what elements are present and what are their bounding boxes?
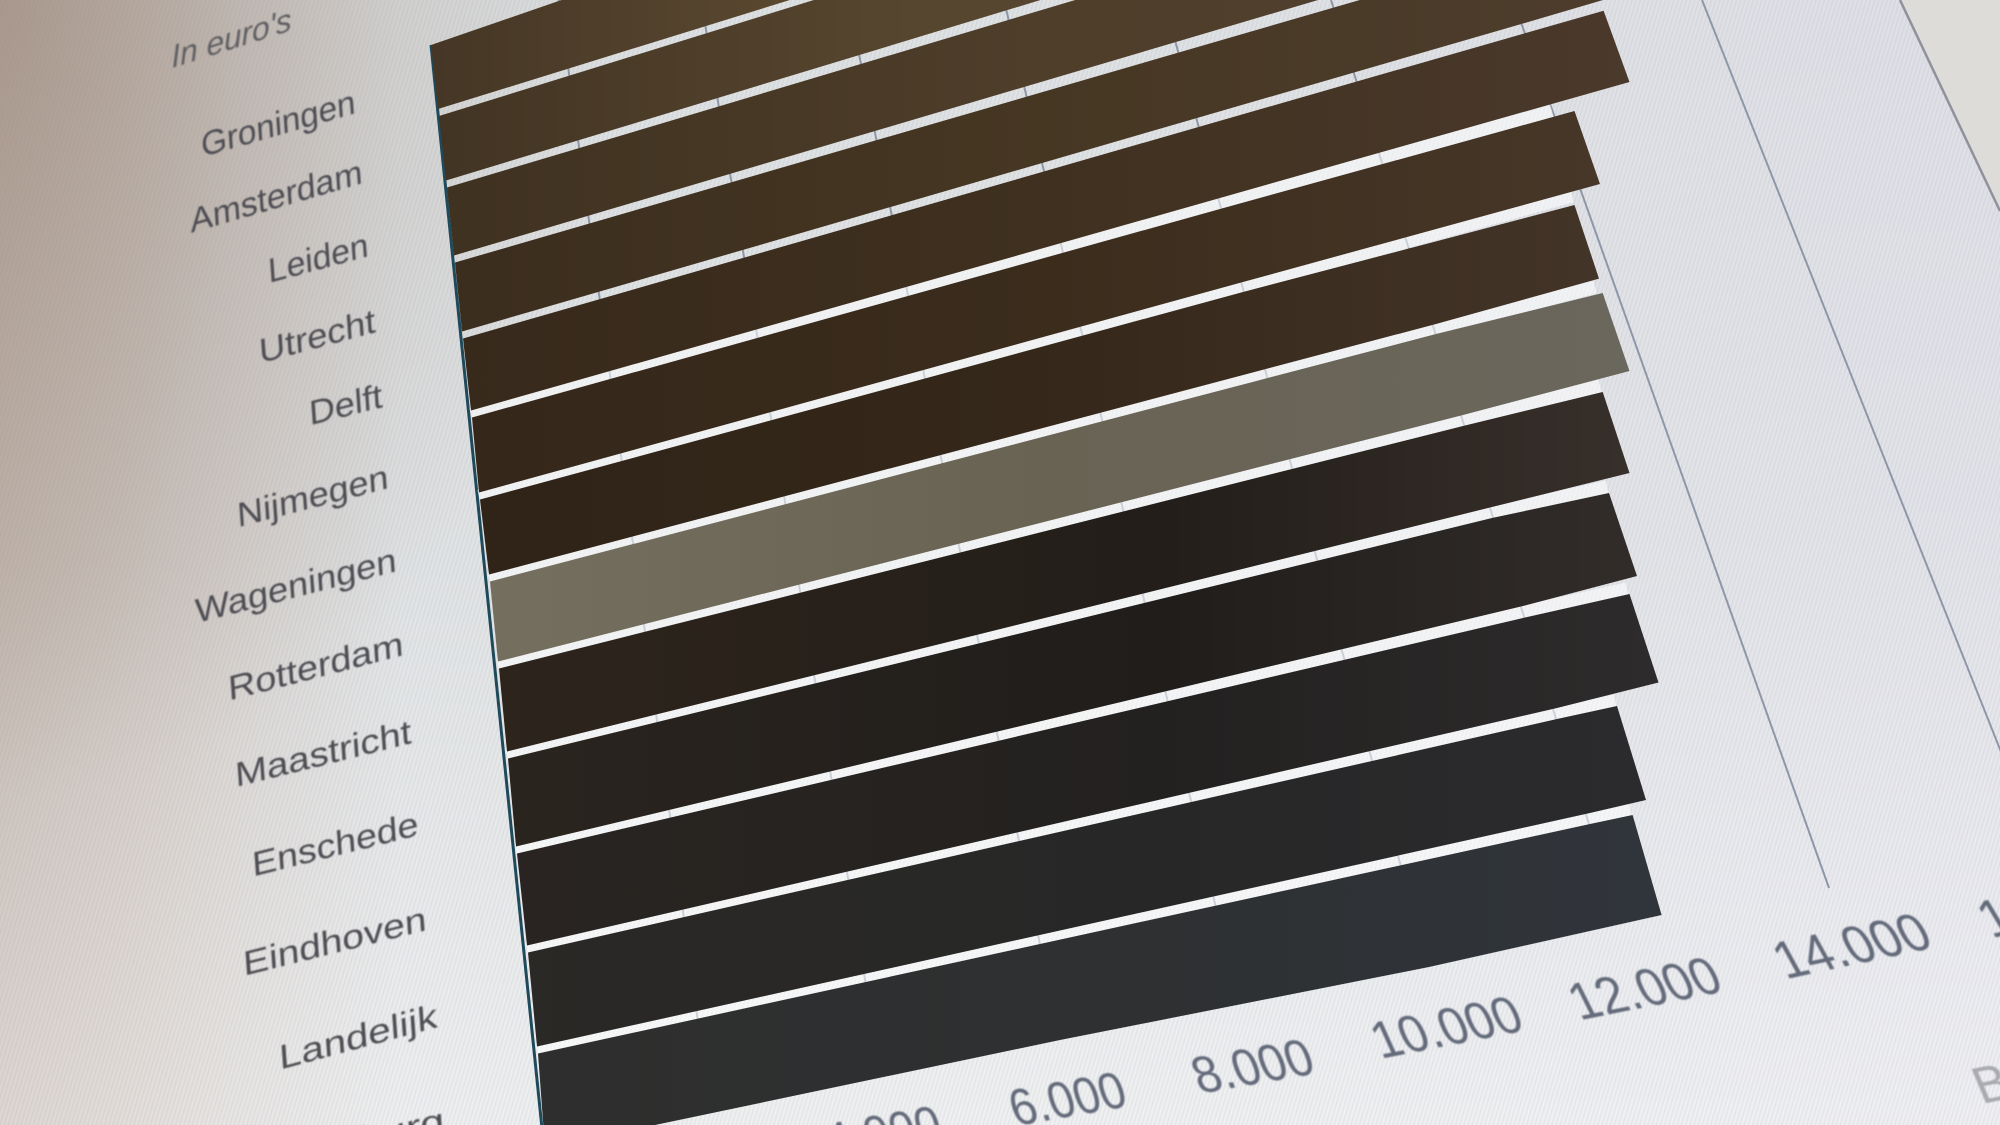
label: Wageningen: Wageningen bbox=[194, 542, 398, 631]
label: Delft: Delft bbox=[308, 377, 384, 433]
bar chart: thirteen horizontal bars in perspective bbox=[431, 0, 1662, 1125]
axis label: 12.000: 12.000 bbox=[1558, 947, 1732, 1031]
label: Rotterdam: Rotterdam bbox=[227, 626, 405, 708]
label: Nijmegen: Nijmegen bbox=[236, 459, 390, 535]
category labels bbox=[170, 1, 446, 1125]
label: Eindhoven: Eindhoven bbox=[242, 900, 428, 984]
axis label: 14.000: 14.000 bbox=[1762, 903, 1942, 990]
axis label: 8.000: 8.000 bbox=[1183, 1029, 1322, 1105]
label: Maastricht: Maastricht bbox=[234, 713, 413, 795]
label: Enschede: Enschede bbox=[251, 805, 420, 884]
axis label: 10.000: 10.000 bbox=[1361, 986, 1532, 1070]
label: Landelijk: Landelijk bbox=[278, 997, 439, 1078]
gridlines bbox=[431, 0, 2000, 1125]
gaps between bars: bright screen strips bbox=[471, 111, 1630, 1050]
panel edge: right border and outer area bbox=[1900, 0, 2000, 211]
label: Groningen: Groningen bbox=[200, 84, 357, 165]
label: Leiden: Leiden bbox=[267, 227, 370, 291]
x axis labels bbox=[818, 859, 2000, 1125]
label: unit: In euro's bbox=[170, 1, 292, 75]
label: Utrecht: Utrecht bbox=[258, 302, 377, 371]
label: Amsterdam: Amsterdam bbox=[189, 154, 364, 241]
